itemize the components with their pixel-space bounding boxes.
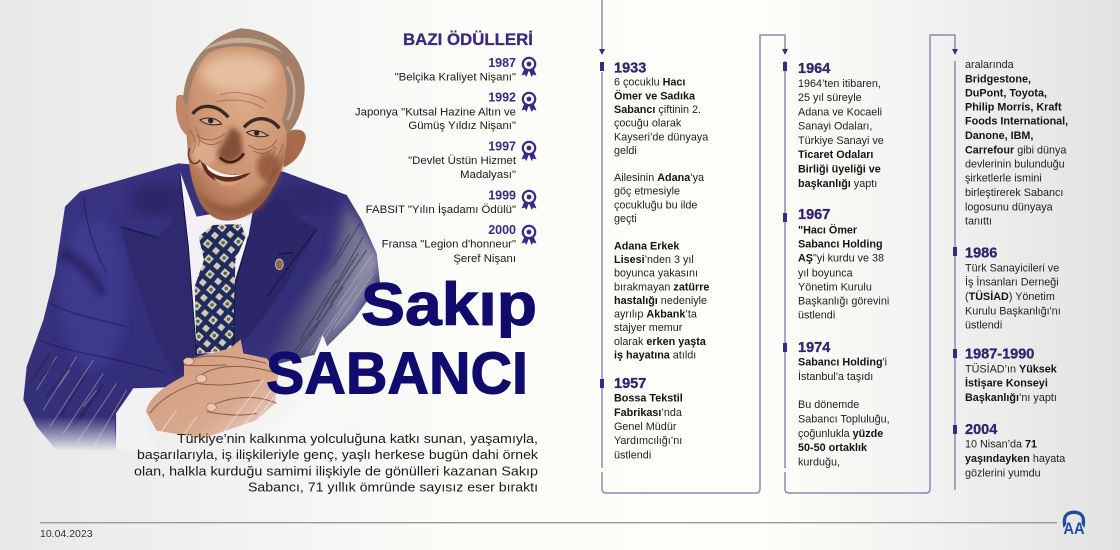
entry 1933: 6 çocuklu Hacı — [614, 77, 685, 89]
entry 2004: yaşındayken hayata — [965, 453, 1065, 465]
timeline connector lines — [602, 0, 955, 493]
entry 1967: Yönetim Kurulu — [798, 281, 872, 293]
award 2000 — [382, 223, 536, 265]
entry 1967: "Hacı Ömer — [798, 223, 858, 236]
award 1997 — [408, 140, 536, 181]
award 1999: 1999 — [488, 188, 516, 202]
lapels — [121, 173, 317, 378]
entry 1957: üstlendi — [614, 449, 651, 461]
entry 1974: Bu dönemde — [798, 399, 859, 411]
entry 1974: çoğunlukla yüzde — [798, 428, 883, 440]
entry 1933: göç etmesiyle — [614, 186, 680, 198]
timeline column 3 — [965, 59, 1068, 479]
title: Sakıp SABANCI: SABANCI — [266, 340, 528, 406]
entry 1967: Başkanlığı görevini — [798, 296, 889, 308]
partner companies text: şirketlerle ismini — [965, 173, 1042, 185]
entry 1933: çocukluğu bu ilde — [614, 199, 697, 211]
entry 1957: Yardımcılığı’nı — [614, 435, 682, 447]
award 1987: 1987 — [488, 56, 516, 70]
award 1999: FABSIT "Yılın İşadamı Ödülü" — [366, 203, 516, 216]
award 1997: Madalyası" — [460, 169, 516, 181]
partner companies text: devlerinin bulunduğu — [965, 159, 1065, 171]
entry 1974: Sabancı Holding'i — [798, 357, 887, 369]
timeline column 1 — [614, 60, 709, 461]
entry 1933: Lisesi’nden 3 yıl — [614, 254, 694, 266]
entry 2004: 2004 — [965, 422, 997, 438]
suit jacket — [20, 163, 383, 453]
entry 1933: Adana Erkek — [614, 240, 680, 252]
entry 1933: bırakmayan zatürre — [614, 281, 709, 293]
entry 1974: İstanbul'a taşıdı — [798, 370, 873, 383]
award 2000: Fransa "Legion d'honneur" — [382, 238, 516, 250]
entry 1957 — [614, 376, 683, 461]
award 1997: "Devlet Üstün Hizmet — [408, 155, 517, 167]
entry 1974: 50-50 ortaklık — [798, 442, 868, 454]
entry 1933: hastalığı nedeniyle — [614, 295, 707, 307]
entry 1964: 1964 — [798, 61, 830, 77]
shirt — [180, 172, 253, 353]
entry 1987-1990: TÜSİAD’ın Yüksek — [965, 362, 1058, 375]
entry 1967: 1967 — [798, 207, 830, 223]
intro paragraph: Sabancı, 71 yıllık ömründe sayısız eser bıraktı — [248, 480, 538, 494]
award 1992 — [355, 90, 536, 132]
entry 1986 — [965, 246, 1061, 331]
entry 1933: çocuğu olarak — [614, 118, 682, 130]
award 2000: 2000 — [488, 223, 516, 237]
entry 1964: Sanayi Odaları, — [798, 121, 872, 133]
head and face — [176, 28, 306, 221]
intro paragraph — [134, 431, 539, 494]
award 1992: 1992 — [488, 90, 516, 104]
entry 1933: ayrılıp Akbank’ta — [614, 309, 697, 321]
entry 1933: iş hayatına atıldı — [614, 349, 696, 361]
entry 1987-1990: Başkanlığı’nı yaptı — [965, 392, 1057, 404]
entry 1933: Ailesinin Adana’ya — [614, 172, 704, 184]
award 1987: "Belçika Kraliyet Nişanı" — [395, 72, 516, 84]
necktie — [195, 224, 246, 353]
entry 2004: gözlerini yumdu — [965, 467, 1041, 479]
clasped hands and cuff — [116, 339, 287, 450]
entry 1967: AŞ"yi kurdu ve 38 — [798, 253, 884, 265]
entry 1933: Kayseri’de dünyaya — [614, 131, 708, 143]
partner companies text: Bridgestone, — [965, 73, 1031, 85]
entry 1957: Genel Müdür — [614, 421, 677, 433]
entry 1974 — [798, 340, 890, 468]
logo: AA: AA — [1064, 519, 1084, 538]
award 2000: Şeref Nişanı — [453, 253, 516, 265]
partner companies text: DuPont, Toyota, — [965, 87, 1047, 99]
partner companies text: logosunu dünyaya — [965, 201, 1053, 213]
entry 1986: üstlendi — [965, 319, 1002, 331]
entry 2004: 10 Nisan’da 71 — [965, 439, 1037, 451]
entry 1933 — [614, 60, 709, 361]
partner companies text: Danone, IBM, — [965, 130, 1033, 142]
entry 1964: Ticaret Odaları — [798, 149, 873, 161]
partner companies text: Carrefour gibi dünya — [965, 144, 1066, 156]
partner companies text: birleştirerek Sabancı — [965, 187, 1063, 199]
entry 1967: yıl boyunca — [798, 267, 853, 279]
timeline markers — [600, 62, 957, 434]
fading streaks — [240, 300, 380, 450]
entry 1964: Birliği üyeliği ve — [798, 163, 881, 175]
entry 1933: stajyer memur — [614, 322, 683, 334]
intro paragraph: başarılarıyla, iş ilişkileriyle genç, yaşlı herkese bugün dahi örnek — [137, 447, 539, 462]
entry 1933: olarak erken yaşta — [614, 336, 707, 348]
title: Sakıp SABANCI — [266, 271, 537, 406]
entry 1933: geldi — [614, 145, 637, 157]
portrait: Sakıp Sabancı illustration — [20, 28, 383, 453]
partner companies text: Foods International, — [965, 116, 1068, 128]
entry 1974: 1974 — [798, 340, 830, 356]
entry 1986: Türk Sanayicileri ve — [965, 262, 1059, 274]
award 1992: Gümüş Yıldız Nişanı" — [408, 120, 516, 132]
partner companies text: tanıttı — [965, 216, 992, 228]
hair — [183, 28, 305, 134]
partner companies text: aralarında — [965, 59, 1014, 71]
intro paragraph: Türkiye’nin kalkınma yolculuğuna katkı sunan, yaşamıyla, — [177, 431, 538, 446]
intro paragraph: olan, halkla kurduğu samimi ilişkiyle de gönülleri kazanan Sakıp — [134, 464, 538, 478]
entry 1964 — [798, 61, 884, 190]
entry 1964: Adana ve Kocaeli — [798, 106, 882, 118]
nose — [218, 127, 243, 162]
award 1997: 1997 — [488, 140, 516, 154]
entry 1933: geçti — [614, 213, 637, 225]
entry 1986: (TÜSİAD) Yönetim — [965, 290, 1055, 303]
wrinkles — [190, 93, 283, 183]
lapel pin — [275, 259, 283, 270]
entry 1933: Ömer ve Sadıka — [614, 89, 696, 102]
entry 2004 — [965, 422, 1065, 479]
white star and crescent hint — [297, 335, 333, 424]
partner companies text — [965, 59, 1068, 228]
entry 1967: Sabancı Holding — [798, 238, 883, 250]
entry 1964: başkanlığı yaptı — [798, 178, 877, 190]
logo: AA — [1063, 510, 1085, 538]
award 1987 — [395, 56, 536, 84]
date: 10.04.2023 — [40, 528, 93, 540]
entry 1957: Bossa Tekstil — [614, 392, 683, 404]
entry 1964: 1964’ten itibaren, — [798, 78, 881, 90]
award 1992: Japonya "Kutsal Hazine Altın ve — [355, 106, 516, 118]
entry 1967 — [798, 207, 889, 322]
entry 1986: Kurulu Başkanlığı'nı — [965, 305, 1061, 317]
footer rule — [40, 522, 1057, 524]
entry 1967: üstlendi — [798, 310, 835, 322]
entry 1974: Sabancı Topluluğu, — [798, 414, 890, 426]
entry 1987-1990: 1987-1990 — [965, 346, 1034, 362]
entry 1933: boyunca yakasını — [614, 268, 698, 280]
arrowheads — [599, 49, 958, 55]
entry 1933: Sabancı çiftinin 2. — [614, 104, 701, 116]
eyes — [200, 118, 222, 125]
entry 1974: kurduğu, — [798, 456, 840, 468]
partner companies text: Philip Morris, Kraft — [965, 101, 1062, 113]
heading: BAZI ÖDÜLLERİ: BAZI ÖDÜLLERİ — [403, 30, 533, 49]
timeline column 2 — [798, 61, 890, 468]
entry 1957: 1957 — [614, 376, 646, 392]
award 1999 — [366, 188, 536, 216]
eyebrows — [193, 106, 228, 117]
smile — [200, 160, 251, 183]
entry 1933: 1933 — [614, 60, 646, 76]
entry 1986: 1986 — [965, 246, 997, 262]
title: Sakıp SABANCI: Sakıp — [361, 271, 537, 338]
entry 1987-1990: İstişare Konseyi — [965, 377, 1048, 390]
entry 1964: Türkiye Sanayi ve — [798, 135, 884, 147]
entry 1964: 25 yıl süreyle — [798, 92, 862, 104]
entry 1986: İş İnsanları Derneği — [965, 276, 1059, 289]
entry 1987-1990 — [965, 346, 1058, 404]
panel: awards list — [355, 56, 536, 265]
entry 1957: Fabrikası’nda — [614, 407, 682, 419]
